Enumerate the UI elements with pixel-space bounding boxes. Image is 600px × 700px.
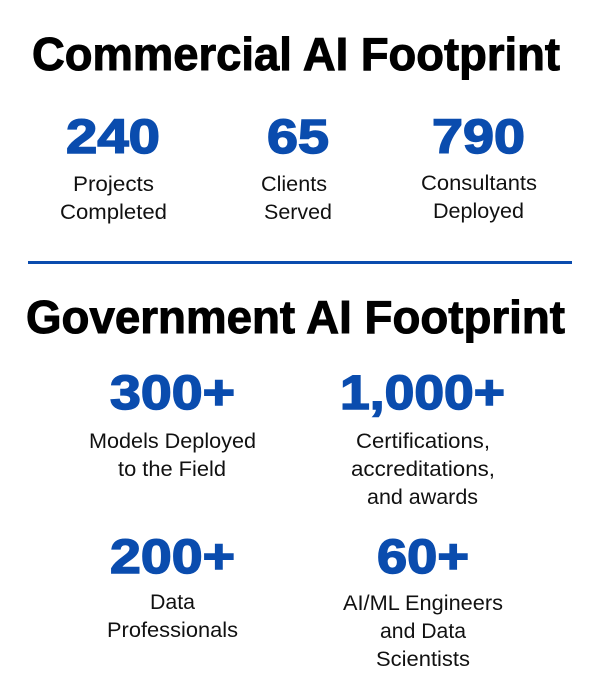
stat: 1,000+ certifications: accreditations,	[351, 458, 495, 481]
stat: 200+ data professionals: 200+	[110, 531, 235, 584]
title: government: Government AI Footprint	[26, 291, 565, 343]
stat: 65 clients served: 65	[267, 111, 329, 164]
stat: 60+ engineers and scientists: AI/ML Engineers	[343, 592, 503, 615]
stat: 1,000+ certifications	[340, 367, 505, 509]
stat: 300+ models deployed	[89, 367, 256, 481]
stat: 240 projects completed: Projects	[73, 173, 154, 196]
title: commercial: Commercial AI Footprint	[32, 28, 560, 80]
stat: 60+ engineers and scientists: and Data	[380, 620, 466, 643]
stat: 300+ models deployed: Models Deployed	[89, 430, 256, 453]
stat: 790 consultants deployed: Deployed	[433, 200, 524, 223]
stat: 200+ data professionals: Professionals	[107, 619, 238, 642]
stat: 65 clients served: Clients	[261, 173, 327, 196]
stat: 790 consultants deployed: 790	[432, 111, 525, 164]
stat: 65 clients served: Served	[264, 201, 332, 224]
stat: 790 consultants deployed	[421, 111, 537, 223]
stat: 65 clients served	[261, 111, 332, 224]
stat: 790 consultants deployed: Consultants	[421, 172, 537, 195]
stat: 1,000+ certifications: and awards	[367, 486, 478, 509]
stat: 240 projects completed: 240	[66, 111, 160, 164]
stat: 240 projects completed: Completed	[60, 201, 167, 224]
stat: 300+ models deployed: 300+	[110, 367, 235, 420]
stat: 240 projects completed	[60, 111, 167, 224]
stat: 200+ data professionals	[107, 531, 238, 642]
stat: 60+ engineers and scientists: Scientists	[376, 648, 470, 671]
stat: 1,000+ certifications: Certifications,	[356, 430, 490, 453]
stat: 60+ engineers and scientists: 60+	[377, 531, 469, 584]
stat: 1,000+ certifications: 1,000+	[340, 367, 505, 420]
stat: 300+ models deployed: to the Field	[118, 458, 226, 481]
stat: 200+ data professionals: Data	[150, 591, 195, 614]
stat: 60+ engineers and scientists	[343, 531, 503, 671]
